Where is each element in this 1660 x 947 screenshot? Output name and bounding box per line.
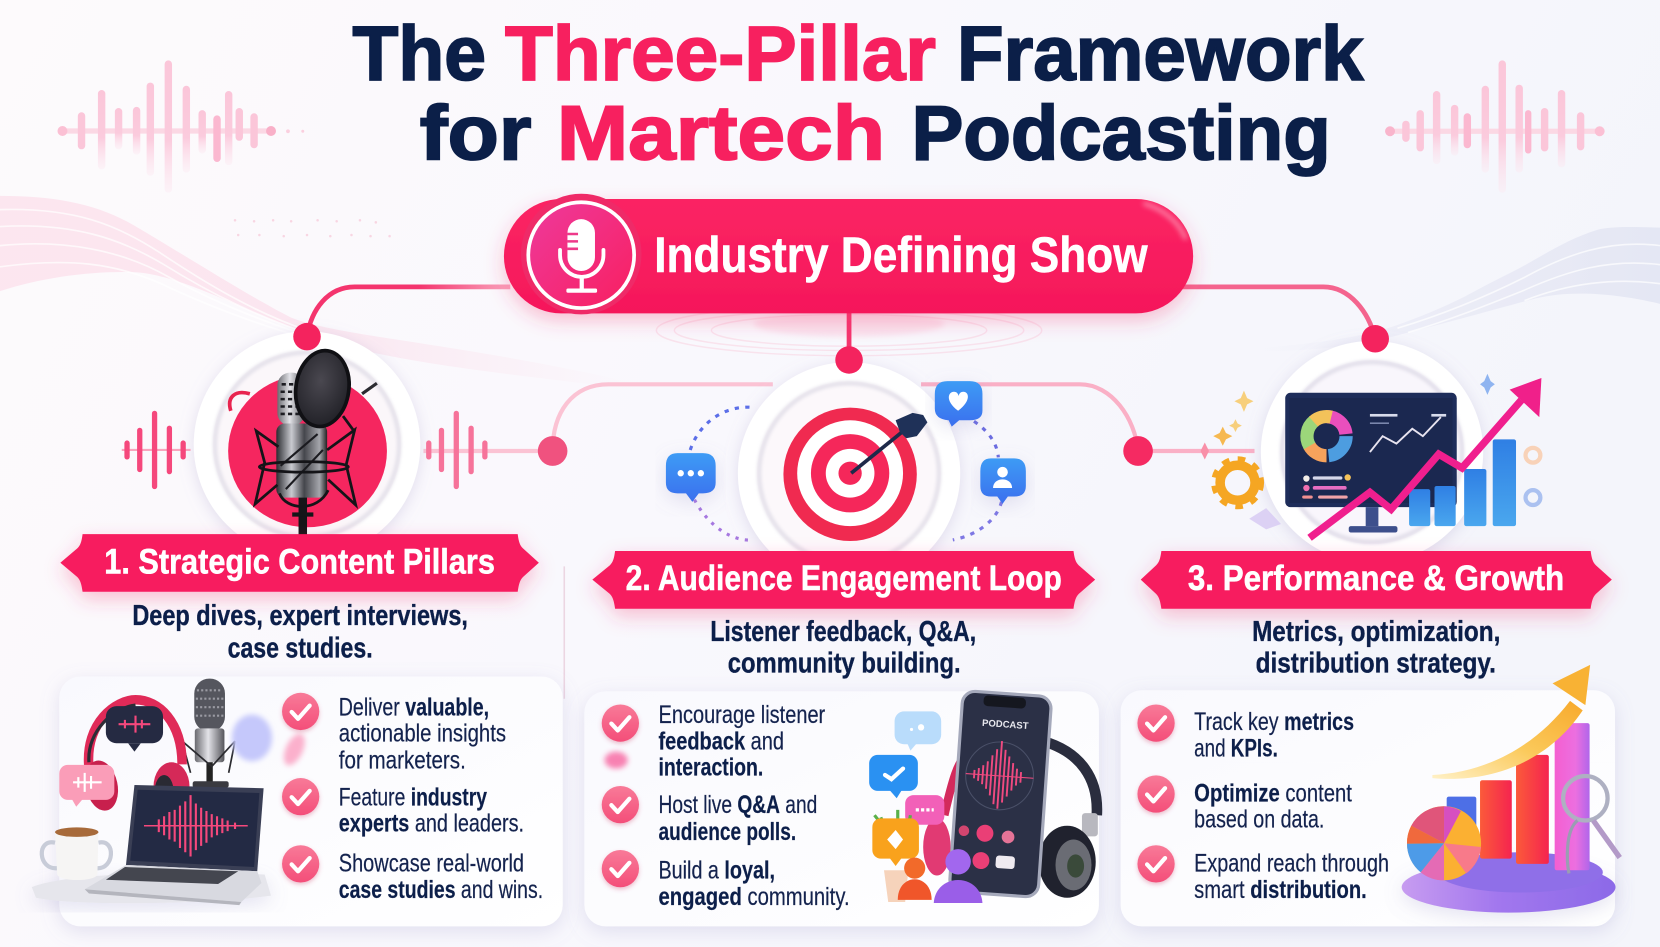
headphones xyxy=(923,741,1098,898)
subtitle: pillar 1 xyxy=(132,600,468,664)
monitor xyxy=(1285,393,1457,533)
card: pillar 3 xyxy=(1121,665,1620,926)
checklist: pillar 3: smart distribution. xyxy=(1194,876,1367,904)
checklist: pillar 1: case studies and wins. xyxy=(339,876,543,904)
pillar 3 icon: dashboard with growth arrow xyxy=(1270,350,1541,554)
subtitle: pillar 1: Deep dives, expert interviews, xyxy=(132,600,468,632)
headphones xyxy=(81,700,190,814)
chat bubble: dots xyxy=(666,453,716,502)
pink bubble xyxy=(59,765,114,807)
chat bubble: person xyxy=(980,458,1026,504)
orange bubble xyxy=(872,818,919,866)
icon: studio microphone xyxy=(560,219,603,293)
banner: pillar 1 xyxy=(60,534,539,592)
waveform: top right xyxy=(1385,60,1605,193)
pie chart xyxy=(1407,806,1481,880)
subtitle: pillar 3: Metrics, optimization, xyxy=(1252,616,1500,648)
checklist: pillar 2: engaged community. xyxy=(658,883,850,911)
checklist: pillar 3: based on data. xyxy=(1194,806,1324,834)
dark bubble xyxy=(106,706,163,752)
laptop xyxy=(85,785,264,905)
mic xyxy=(182,679,235,789)
panel: pillar 3 xyxy=(1121,551,1620,926)
waveform: top left xyxy=(57,60,304,193)
checklist: pillar 2: Encourage listener xyxy=(658,701,825,729)
plant xyxy=(874,810,910,834)
connector dots xyxy=(293,323,1389,466)
subtitle: pillar 3: distribution strategy. xyxy=(1256,648,1496,680)
smudges xyxy=(605,752,628,769)
title: for xyxy=(420,90,531,176)
illustration: bar chart with growth arrow xyxy=(1402,665,1620,913)
checklist: pillar 3: Expand reach through xyxy=(1194,850,1389,878)
title: The xyxy=(353,11,486,97)
checklist: pillar 2: feedback and xyxy=(658,727,784,755)
sparkles xyxy=(1201,374,1540,529)
title xyxy=(353,11,1365,176)
ghost bubble xyxy=(232,715,272,761)
checklist: pillar 2: Build a loyal, xyxy=(658,856,775,884)
checklist: pillar 3: Track key metrics xyxy=(1194,708,1354,736)
blue bubble xyxy=(869,755,918,798)
title: Martech xyxy=(557,90,885,176)
card: pillar 2 xyxy=(584,691,1099,926)
panel: pillar 2 xyxy=(584,551,1099,926)
gold arrow xyxy=(1432,665,1590,779)
subtitle: pillar 1: case studies. xyxy=(228,632,373,664)
chart bars xyxy=(1447,723,1590,870)
purple person xyxy=(934,849,982,903)
pillar 2 icon: target ring xyxy=(690,372,1002,575)
title: Podcasting xyxy=(912,90,1331,176)
subtitle: pillar 2: Listener feedback, Q&A, xyxy=(710,616,976,648)
checklist: pillar 1: Showcase real-world xyxy=(339,849,524,877)
pillar 1 icon: microphone ring xyxy=(203,341,411,548)
checklist: pillar 2: interaction. xyxy=(658,754,763,782)
phone: PODCAST xyxy=(982,718,1029,732)
blue bars xyxy=(1409,439,1516,526)
checklist: pillar 1: for marketers. xyxy=(339,747,466,775)
checklist: pillar 2 xyxy=(602,701,850,911)
subtitle: pillar 2 xyxy=(710,616,976,680)
title: Three-Pillar xyxy=(505,11,936,97)
phone xyxy=(949,691,1052,897)
connector: pillar 2 to pillar 3 xyxy=(921,384,1255,451)
illustration: phone, bubbles and headphones xyxy=(869,691,1098,903)
banner: pillar 2: 2. Audience Engagement Loop xyxy=(626,559,1062,598)
checklist: pillar 3 xyxy=(1137,704,1389,904)
checklist: pillar 1: actionable insights xyxy=(339,720,506,748)
connector: hub to pillar 3 xyxy=(1180,287,1375,339)
dart arrow xyxy=(851,413,927,473)
checklist: pillar 3: and KPIs. xyxy=(1194,735,1278,763)
connector: pillar 1 to pillar 2 xyxy=(423,384,773,451)
checklist: pillar 2: audience polls. xyxy=(658,818,796,846)
pink bubble xyxy=(905,795,944,825)
pillar 1 side waveforms xyxy=(122,411,488,489)
hub pill: Industry Defining Show xyxy=(504,194,1193,314)
subtitle: pillar 2: community building. xyxy=(728,648,961,680)
icon: gear xyxy=(1214,459,1261,506)
checklist: pillar 1 xyxy=(282,693,543,904)
checklist: pillar 1: experts and leaders. xyxy=(339,810,524,838)
connector: hub to pillar 1 xyxy=(307,287,510,337)
mug xyxy=(42,827,111,880)
banner: pillar 1: 1. Strategic Content Pillars xyxy=(104,542,495,581)
hub pill: Industry Defining Show: Industry Defining Show xyxy=(654,227,1148,283)
title: Framework xyxy=(957,11,1365,97)
banner: pillar 3 xyxy=(1141,551,1612,609)
checklist: pillar 2: Host live Q&A and xyxy=(658,791,817,819)
checklist: pillar 3: Optimize content xyxy=(1194,779,1352,807)
orange person xyxy=(898,858,932,900)
chat bubble: heart xyxy=(935,381,982,427)
shock mount xyxy=(255,416,356,506)
growth arrow xyxy=(1310,400,1521,538)
checklist: pillar 1: Deliver valuable, xyxy=(339,694,489,722)
banner: pillar 2 xyxy=(592,551,1095,609)
pot xyxy=(884,870,908,902)
light blue bubble xyxy=(895,711,941,751)
illustration: laptop, mic and headphones xyxy=(32,679,309,905)
connector: hub to pillar 2 xyxy=(847,307,851,360)
banner: pillar 3: 3. Performance & Growth xyxy=(1188,559,1564,598)
card: pillar 1 xyxy=(32,677,563,926)
background flowing waves xyxy=(0,196,1660,390)
checklist: pillar 1: Feature industry xyxy=(339,784,487,812)
magnifier xyxy=(1563,776,1620,873)
panel: pillar 1 xyxy=(32,534,563,926)
platform xyxy=(1402,852,1616,913)
smudge xyxy=(279,731,309,768)
subtitle: pillar 3 xyxy=(1252,616,1500,680)
